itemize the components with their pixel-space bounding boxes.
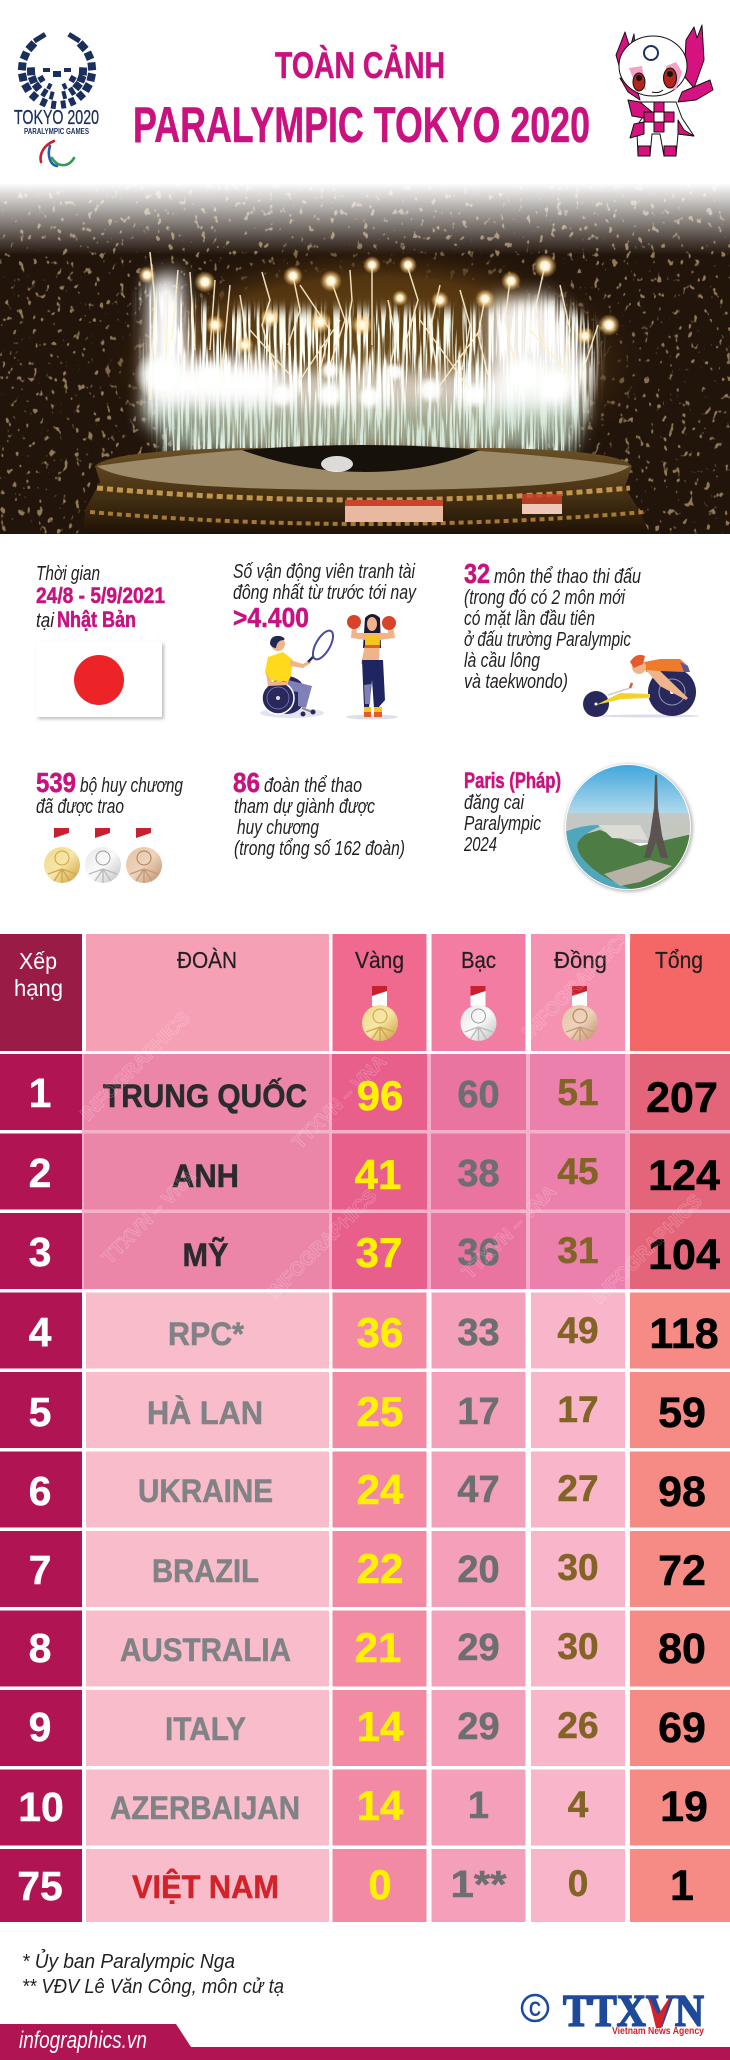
row: Hà Lan: 5 bbox=[29, 1389, 51, 1435]
icon: silver medal bbox=[85, 828, 121, 883]
athletes number: >4.400 bbox=[233, 602, 309, 633]
footnote 1: * Ủy ban Paralympic Nga bbox=[22, 1949, 235, 1973]
title line 1: TOÀN CẢNH bbox=[275, 45, 445, 86]
row: Trung Quốc: 207 bbox=[646, 1074, 718, 1122]
row: RPC: RPC* bbox=[168, 1316, 245, 1352]
row: Azerbaijan: 4 bbox=[568, 1784, 589, 1825]
row: Việt Nam bbox=[0, 1849, 730, 1922]
row: Mỹ: 37 bbox=[356, 1229, 402, 1276]
city lights bbox=[0, 183, 730, 534]
panel: athletes bbox=[233, 561, 417, 720]
table header row bbox=[0, 934, 730, 1051]
copyright symbol: C bbox=[529, 1998, 541, 2021]
firework glow bbox=[104, 244, 646, 448]
firework bright core bbox=[140, 272, 590, 452]
delegation heading: ĐOÀN bbox=[177, 947, 237, 973]
row: Trung Quốc: TRUNG QUỐC bbox=[103, 1078, 307, 1114]
watermarks: TTXVN – VNA bbox=[289, 1051, 391, 1154]
row: Australia: 29 bbox=[457, 1627, 500, 1669]
row: Azerbaijan bbox=[0, 1770, 730, 1846]
row: Trung Quốc: 96 bbox=[357, 1072, 403, 1119]
footnotes bbox=[22, 1949, 284, 1998]
row: Trung Quốc: 51 bbox=[557, 1072, 599, 1113]
row: Ukraine: 6 bbox=[29, 1468, 51, 1514]
row: Brazil: 20 bbox=[457, 1549, 500, 1591]
row: Việt Nam: 0 bbox=[568, 1863, 588, 1904]
sports text line 2: (trong đó có 2 môn mới bbox=[464, 587, 625, 609]
icon: gold medal bbox=[44, 828, 80, 883]
row: Mỹ: 36 bbox=[457, 1232, 500, 1274]
panel: sports bbox=[464, 558, 700, 718]
row: Trung Quốc: 1 bbox=[29, 1070, 51, 1116]
top white fade bbox=[0, 183, 730, 255]
row: Mỹ: 104 bbox=[648, 1231, 720, 1279]
total heading: Tổng bbox=[655, 947, 703, 973]
icon: silver medal bbox=[460, 986, 496, 1041]
row: Anh: ANH bbox=[172, 1158, 239, 1194]
row: Trung Quốc: 60 bbox=[457, 1074, 500, 1116]
logo: TTXVN bbox=[522, 1986, 704, 2037]
row: Australia: 80 bbox=[658, 1625, 706, 1673]
row: Mỹ: MỸ bbox=[182, 1237, 228, 1273]
delegations text line 4: (trong tổng số 162 đoàn) bbox=[234, 838, 405, 860]
logo: Tokyo 2020 Paralympic Games bbox=[14, 32, 99, 166]
watermarks: INFOGRAPHICS bbox=[77, 1008, 195, 1126]
icon: agitos bbox=[41, 141, 74, 166]
row: Việt Nam: 1 bbox=[670, 1862, 694, 1910]
medals number: 539 bbox=[36, 767, 76, 798]
row: Italy bbox=[0, 1690, 730, 1766]
watermarks: TTXVN – VNA bbox=[99, 1166, 201, 1269]
row: Brazil: 30 bbox=[557, 1547, 599, 1588]
medals text line 1: bộ huy chương bbox=[80, 775, 183, 797]
footer bar bbox=[0, 2024, 730, 2060]
row: Mỹ: 31 bbox=[557, 1230, 599, 1271]
row: Anh: 2 bbox=[29, 1150, 51, 1196]
row: Brazil: 7 bbox=[29, 1547, 51, 1593]
row: Australia: 8 bbox=[29, 1625, 51, 1671]
row: Anh: 124 bbox=[648, 1152, 720, 1200]
host text line 1: đăng cai bbox=[464, 792, 524, 814]
icon: racing wheelchair athlete bbox=[583, 655, 700, 718]
row: RPC: 33 bbox=[457, 1312, 500, 1354]
watermarks: INFOGRAPHICS bbox=[589, 1191, 707, 1309]
location label: tại bbox=[36, 610, 54, 632]
sports text line 3: có mặt lần đầu tiên bbox=[464, 608, 595, 630]
row: Hà Lan: HÀ LAN bbox=[147, 1395, 263, 1431]
row: Italy: 9 bbox=[29, 1704, 51, 1750]
row: Australia: 21 bbox=[355, 1624, 401, 1671]
icon: para athlete boxer bbox=[346, 614, 398, 720]
watermarks: INFOGRAPHICS bbox=[519, 926, 637, 1044]
gold heading: Vàng bbox=[355, 947, 404, 973]
TTXVN wordmark: TTXVN bbox=[563, 1986, 704, 2036]
panel: medals awarded bbox=[36, 767, 183, 883]
row: Hà Lan: 25 bbox=[357, 1388, 403, 1435]
row: Italy: 29 bbox=[457, 1706, 500, 1748]
night sky background bbox=[0, 183, 730, 534]
row: Azerbaijan: AZERBAIJAN bbox=[110, 1790, 300, 1826]
footer website: infographics.vn bbox=[19, 2027, 147, 2054]
row: Australia: 30 bbox=[557, 1626, 599, 1667]
row: Italy: 26 bbox=[557, 1705, 599, 1746]
row: Brazil bbox=[0, 1531, 730, 1607]
row: Anh: 45 bbox=[557, 1151, 599, 1192]
row: Ukraine: 98 bbox=[658, 1468, 706, 1516]
row: Hà Lan: 59 bbox=[658, 1389, 706, 1437]
red V accent bbox=[648, 1995, 671, 2028]
title bbox=[133, 45, 590, 153]
watermarks bbox=[77, 926, 707, 1309]
watermarks: TTXVN – VNA bbox=[459, 1181, 561, 1284]
row: Mỹ bbox=[0, 1213, 730, 1289]
row: Australia: AUSTRALIA bbox=[120, 1632, 291, 1668]
photo: Paris and Eiffel Tower bbox=[564, 764, 693, 892]
row: Việt Nam: VIỆT NAM bbox=[132, 1869, 279, 1905]
sports text line 4: ở đấu trường Paralympic bbox=[464, 629, 631, 651]
icon: wheelchair tennis player bbox=[260, 628, 337, 718]
sports text line 6: và taekwondo) bbox=[464, 671, 568, 693]
row: Italy: 14 bbox=[357, 1703, 404, 1750]
row: Brazil: 72 bbox=[658, 1547, 706, 1595]
stadium bbox=[82, 445, 650, 534]
icon: bronze medal bbox=[562, 986, 598, 1041]
row: Việt Nam: 0 bbox=[368, 1861, 392, 1908]
row: Anh bbox=[0, 1134, 730, 1210]
panel: delegations bbox=[233, 767, 405, 860]
row: Hà Lan: 17 bbox=[457, 1391, 500, 1433]
footnote 2: ** VĐV Lê Văn Công, môn cử tạ bbox=[22, 1976, 284, 1998]
sports text line 1: môn thể thao thi đấu bbox=[494, 566, 641, 588]
row: Ukraine: 24 bbox=[357, 1466, 404, 1513]
row: Italy: 69 bbox=[658, 1704, 706, 1752]
row: Hà Lan bbox=[0, 1372, 730, 1448]
rank heading bbox=[14, 948, 63, 1001]
row: RPC: 4 bbox=[29, 1309, 52, 1355]
icon: bronze medal bbox=[126, 828, 162, 883]
logo wordmark: TOKYO 2020 bbox=[14, 107, 99, 129]
row: Ukraine: UKRAINE bbox=[138, 1473, 273, 1509]
row: Trung Quốc bbox=[0, 1054, 730, 1130]
row: Azerbaijan: 1 bbox=[468, 1785, 489, 1827]
athletes text line 2: đông nhất từ trước tới nay bbox=[233, 582, 417, 604]
row: Brazil: 22 bbox=[357, 1545, 403, 1592]
row: Ukraine: 27 bbox=[557, 1468, 599, 1509]
firework sparks bbox=[150, 252, 598, 400]
row: Azerbaijan: 19 bbox=[660, 1783, 708, 1831]
date text: Thời gian bbox=[36, 563, 100, 585]
firework star bursts bbox=[134, 254, 620, 410]
row: Ukraine bbox=[0, 1452, 730, 1528]
agency name: Vietnam News Agency bbox=[612, 2025, 704, 2037]
row: Azerbaijan: 10 bbox=[18, 1784, 64, 1830]
location value: Nhật Bản bbox=[57, 607, 136, 632]
row: Mỹ: 3 bbox=[29, 1229, 51, 1275]
row: Việt Nam: 75 bbox=[17, 1863, 63, 1909]
row: RPC: 36 bbox=[357, 1309, 403, 1356]
row: Australia bbox=[0, 1610, 730, 1686]
row: Anh: 38 bbox=[457, 1153, 500, 1195]
row: Ukraine: 47 bbox=[457, 1469, 500, 1511]
row: Việt Nam: 1** bbox=[450, 1864, 507, 1906]
photo: stadium and fireworks bbox=[0, 183, 730, 534]
icon: Someity mascot bbox=[616, 25, 713, 156]
silver heading: Bạc bbox=[461, 947, 496, 973]
icon: gold medal bbox=[362, 986, 398, 1041]
copyright symbol bbox=[522, 1995, 548, 2021]
row gaps backing for top rows bbox=[82, 1054, 730, 1289]
medal table bbox=[0, 934, 730, 1922]
bronze heading: Đồng bbox=[554, 947, 607, 973]
row: RPC: 118 bbox=[649, 1310, 719, 1358]
rank heading: Xếp bbox=[19, 948, 57, 974]
icon: Japan flag bbox=[36, 642, 164, 719]
delegations text line 2: tham dự giành được bbox=[234, 796, 375, 818]
panel: next host bbox=[463, 764, 693, 892]
host city: Paris (Pháp) bbox=[464, 768, 561, 793]
row: Anh: 41 bbox=[355, 1151, 401, 1198]
host text line 3: 2024 bbox=[463, 834, 497, 856]
firework streaks bbox=[132, 283, 606, 452]
icon: checkered wreath bbox=[18, 32, 96, 109]
row: Hà Lan: 17 bbox=[557, 1389, 599, 1430]
row: RPC bbox=[0, 1292, 730, 1368]
date value: 24/8 - 5/9/2021 bbox=[36, 583, 165, 608]
athletes text line 1: Số vận động viên tranh tài bbox=[233, 561, 415, 583]
row: Azerbaijan: 14 bbox=[357, 1782, 404, 1829]
row: RPC: 49 bbox=[557, 1310, 599, 1351]
host text line 2: Paralympic bbox=[464, 813, 541, 835]
rank heading: hạng bbox=[14, 975, 63, 1001]
delegations text line 3: huy chương bbox=[237, 817, 319, 839]
row: Italy: ITALY bbox=[165, 1711, 246, 1747]
row: Brazil: BRAZIL bbox=[152, 1553, 259, 1589]
watermarks: INFOGRAPHICS bbox=[264, 1186, 382, 1304]
delegations text line 1: đoàn thể thao bbox=[264, 775, 362, 797]
panel: dates bbox=[36, 563, 165, 719]
sports number: 32 bbox=[464, 558, 490, 589]
logo subtitle: PARALYMPIC GAMES bbox=[24, 127, 90, 136]
delegations number: 86 bbox=[233, 767, 260, 798]
medals text line 2: đã được trao bbox=[36, 796, 124, 818]
sports text line 5: là cầu lông bbox=[464, 650, 540, 672]
